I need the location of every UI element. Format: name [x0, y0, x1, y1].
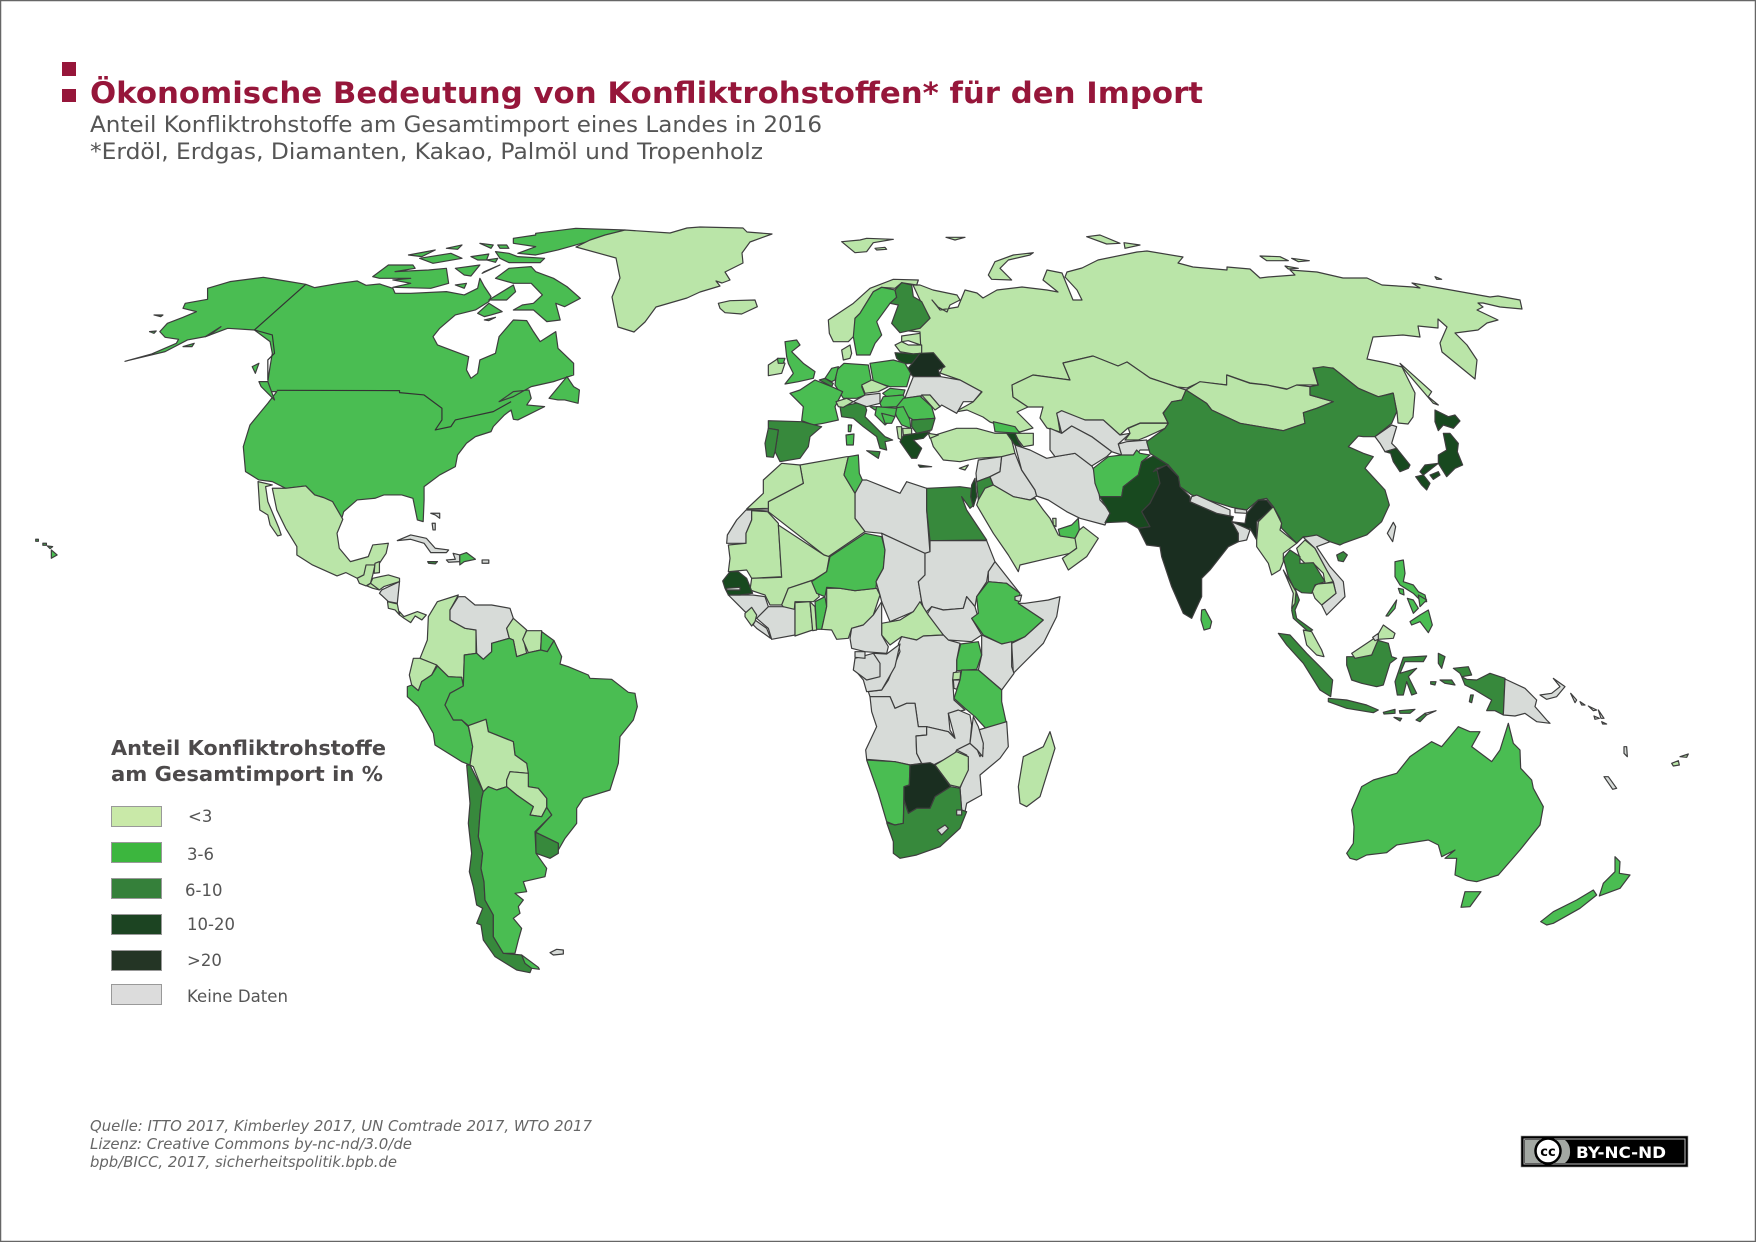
- Niger: [812, 533, 885, 597]
- world map: [36, 227, 1688, 973]
- icon: title squares: [62, 62, 76, 102]
- map: North and Central America: [36, 228, 625, 623]
- Sri Lanka: [1201, 609, 1212, 630]
- North Africa: [747, 455, 987, 557]
- Chile: [467, 765, 532, 973]
- China: [1147, 367, 1397, 545]
- Tasmania: [1461, 892, 1481, 907]
- Turkey, Caucasus and Middle East: [928, 422, 1111, 572]
- New Zealand: [1541, 857, 1630, 925]
- legend item: no data: Keine Daten: [187, 987, 288, 1006]
- Pakistan: [1100, 456, 1168, 528]
- source and licence: Lizenz: Creative Commons by-nc-nd/3.0/de: [90, 1135, 412, 1153]
- map: Russia: [900, 251, 1522, 432]
- Western and Central Europe: [765, 340, 911, 462]
- map: Central, South and East Asia: [1050, 235, 1463, 618]
- Venezuela: [450, 597, 513, 659]
- Madagascar: [1018, 732, 1055, 807]
- Eastern Europe and Balkans: [870, 377, 982, 467]
- Caribbean islands: [397, 513, 489, 565]
- legend title: [111, 736, 386, 786]
- map: Kazakhstan: [1012, 356, 1186, 435]
- Central Asia: [1050, 411, 1168, 466]
- icon: Creative Commons BY-NC-ND badge: cc: [1540, 1145, 1556, 1160]
- Canadian Arctic islands: [150, 228, 625, 403]
- Peru: [407, 666, 473, 765]
- Indonesia: [1278, 625, 1505, 722]
- legend title: Anteil Konfliktrohstoffe: [111, 736, 386, 760]
- legend title: am Gesamtimport in %: [111, 762, 383, 786]
- Hawaii: [36, 539, 57, 558]
- Japan: [1416, 410, 1463, 490]
- source and licence: Quelle: ITTO 2017, Kimberley 2017, UN Comtrade 2017, WTO 2017: [90, 1117, 592, 1135]
- Australia: [1347, 723, 1543, 882]
- Tanzania: [954, 670, 1006, 729]
- Brazil: [445, 638, 637, 850]
- icon: Creative Commons BY-NC-ND badge: BY-NC-ND: [1576, 1143, 1666, 1162]
- Scandinavia and Baltics: [828, 279, 945, 377]
- Philippines: [1386, 560, 1432, 633]
- Ethiopia: [972, 582, 1043, 644]
- Siberian islands: [1087, 235, 1442, 405]
- legend item: below 3: [112, 806, 212, 826]
- South Africa: [887, 787, 967, 858]
- Senegal: [723, 572, 768, 620]
- Papua New Guinea and Pacific islands: [1503, 678, 1688, 789]
- Thailand: [1283, 550, 1325, 632]
- Mexico and Central America: [258, 482, 426, 623]
- legend item: above 20: >20: [187, 951, 222, 970]
- legend item: 6 to 10: 6-10: [185, 881, 222, 900]
- legend item: 10 to 20: 10-20: [187, 915, 235, 934]
- map: Greenland: [576, 227, 772, 332]
- legend item: 3 to 6: [112, 842, 214, 864]
- Colombia: [420, 595, 476, 687]
- Botswana: [904, 763, 951, 813]
- legend item: 3 to 6: 3-6: [187, 845, 214, 864]
- India: [1138, 465, 1273, 618]
- title: Ökonomische Bedeutung von Konfliktrohstoffen* für den Import: [90, 76, 1203, 110]
- legend item: below 3: <3: [188, 807, 212, 826]
- map: South America: [407, 595, 637, 973]
- Bolivia: [468, 719, 528, 792]
- map: Europe, Middle East, North Africa: [718, 237, 1111, 572]
- map: Sub-Saharan Africa: [723, 510, 1060, 858]
- legend: [111, 736, 386, 1006]
- map: Southeast Asia and Oceania: [1201, 550, 1688, 925]
- Canada, USA and Alaska: [125, 277, 574, 522]
- Mongolia: [1186, 375, 1333, 431]
- subtitle: Anteil Konfliktrohstoffe am Gesamtimport eines Landes in 2016: [90, 113, 822, 138]
- source and licence: [90, 1117, 592, 1171]
- Afghanistan: [1093, 450, 1150, 497]
- footnote on commodities: *Erdöl, Erdgas, Diamanten, Kakao, Palmöl und Tropenholz: [90, 140, 763, 165]
- legend item: no data: [112, 984, 288, 1006]
- title block: [62, 62, 1203, 165]
- icon: Creative Commons BY-NC-ND badge: [1521, 1136, 1688, 1167]
- Argentina: [478, 787, 552, 953]
- legend item: 6 to 10: [112, 878, 222, 900]
- legend item: above 20: [112, 950, 222, 970]
- source and licence: bpb/BICC, 2017, sicherheitspolitik.bpb.de: [90, 1153, 397, 1171]
- legend item: 10 to 20: [112, 914, 235, 934]
- Arctic islands: [718, 237, 1033, 314]
